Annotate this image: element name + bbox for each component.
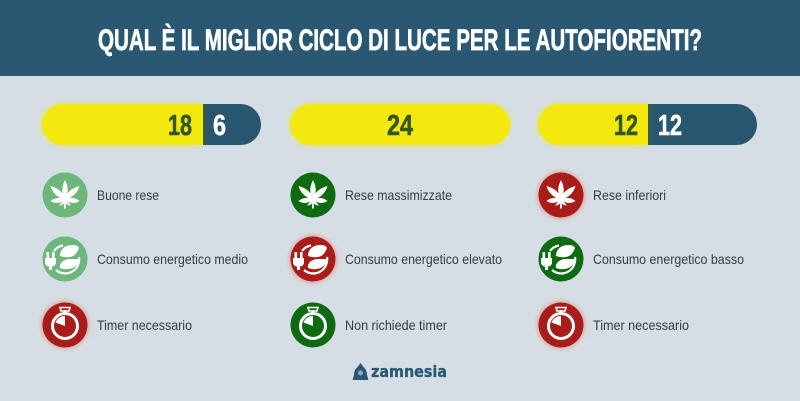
label: energy: Consumo energetico elevato: [345, 251, 502, 267]
logo: zamnesia: [352, 362, 447, 381]
light bar 12 / 12: 12: [658, 110, 682, 142]
panel: 12/12 cycle: [537, 103, 757, 349]
label: yield: Rese massimizzate: [345, 187, 452, 203]
icon: energy, high: [289, 235, 337, 283]
label: yield: Buone rese: [97, 187, 159, 203]
icon: timer required: [537, 301, 585, 349]
wordmark: zamnesia: [371, 362, 447, 381]
light bar 18 / 6: 18: [168, 110, 192, 142]
icon: no timer: [290, 302, 336, 348]
light bar 24: 24: [387, 110, 413, 142]
label: timer: Timer necessario: [593, 317, 689, 333]
label: timer: Timer necessario: [97, 317, 192, 333]
label: energy: Consumo energetico basso: [593, 251, 744, 267]
icon: energy, medium: [42, 236, 88, 282]
header banner: [0, 0, 800, 76]
icon: yield, lower: [537, 171, 585, 219]
light bar 12 / 12: [537, 103, 757, 146]
light bar 24: [289, 103, 511, 146]
light bar 18 / 6: 6: [213, 110, 226, 142]
label: timer: Non richiede timer: [345, 317, 447, 333]
light bar 18 / 6: [41, 103, 261, 146]
label: energy: Consumo energetico medio: [97, 251, 248, 267]
icon: energy, low: [538, 236, 584, 282]
icon: logo mascot: [352, 363, 368, 380]
label: yield: Rese inferiori: [593, 187, 666, 203]
icon: yield, good: [42, 172, 88, 218]
panel: 18/6 cycle: [41, 103, 261, 349]
panel: 24 cycle: [289, 103, 511, 348]
light bar 12 / 12: 12: [614, 110, 638, 142]
icon: yield, maximised: [290, 172, 336, 218]
icon: timer required: [41, 301, 89, 349]
